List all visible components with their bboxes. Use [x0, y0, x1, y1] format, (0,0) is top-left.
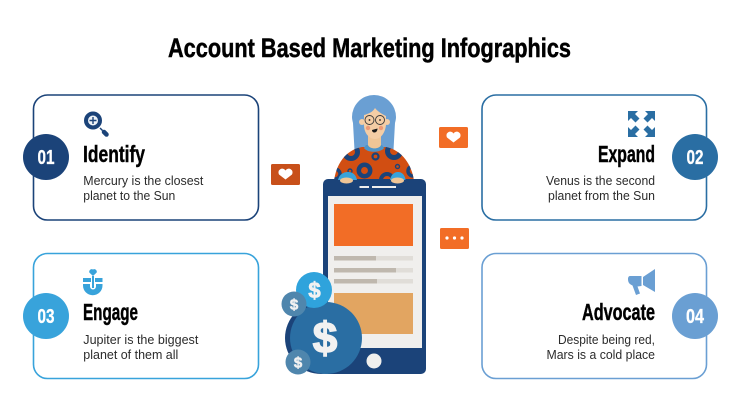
heading: Advocate: Advocate [582, 299, 655, 325]
face [359, 108, 390, 139]
number badge 02 [672, 134, 718, 180]
title: Account Based Marketing Infographics [168, 33, 571, 63]
person illustration [334, 95, 414, 179]
number badge 04 [672, 293, 718, 339]
coins [282, 272, 362, 374]
text: Expand description: Venus is the second [546, 173, 655, 188]
icon: expand arrows [628, 111, 655, 137]
heading: Expand: Expand [598, 141, 655, 167]
text: Identify description [83, 173, 204, 203]
hands on phone [338, 172, 406, 184]
text: Engage description: planet of them all [83, 347, 178, 362]
collar [364, 145, 384, 152]
text: Advocate description: Despite being red, [558, 332, 655, 347]
icon: megaphone [628, 269, 655, 295]
home button [366, 354, 382, 368]
number badge 01 [23, 134, 69, 180]
text: Identify description: planet to the Sun [83, 188, 175, 203]
number badge 01: 01 [38, 147, 54, 169]
text: Engage description: Jupiter is the biggest [83, 332, 199, 347]
number badge 03 [23, 293, 69, 339]
icon: heart message right [439, 127, 468, 148]
number badge 02: 02 [686, 147, 704, 169]
icon: typing dots message [440, 228, 469, 249]
panel: 04 Advocate [482, 254, 718, 378]
text: Engage description [83, 332, 199, 362]
icon: magnet with heart [83, 269, 102, 295]
bottom small coin: $ [294, 354, 303, 372]
image block [334, 204, 413, 246]
text: Expand description [546, 173, 655, 203]
text: Advocate description: Mars is a cold place [546, 347, 655, 362]
number badge 03: 03 [38, 306, 54, 328]
speaker [360, 186, 396, 188]
large coin: $ [313, 314, 337, 363]
text: Advocate description [546, 332, 655, 362]
heading: Identify: Identify [83, 141, 145, 167]
heading: Engage: Engage [83, 299, 138, 325]
number badge 04: 04 [686, 306, 705, 328]
hair [352, 95, 396, 150]
panel: 01 Identify [23, 95, 258, 220]
neck [368, 134, 381, 148]
body with ring pattern [334, 147, 414, 179]
panel: 03 Engage [23, 254, 258, 378]
icon: heart message left [271, 164, 300, 185]
text: Expand description: planet from the Sun [548, 188, 655, 203]
panel: 02 Expand [482, 95, 718, 220]
top coin: $ [308, 278, 321, 303]
icon: magnifier [86, 114, 106, 134]
phone [323, 179, 426, 374]
text lines [334, 256, 413, 284]
text: Identify description: Mercury is the closest [83, 173, 204, 188]
tan block [334, 293, 413, 334]
left small coin: $ [290, 296, 299, 314]
